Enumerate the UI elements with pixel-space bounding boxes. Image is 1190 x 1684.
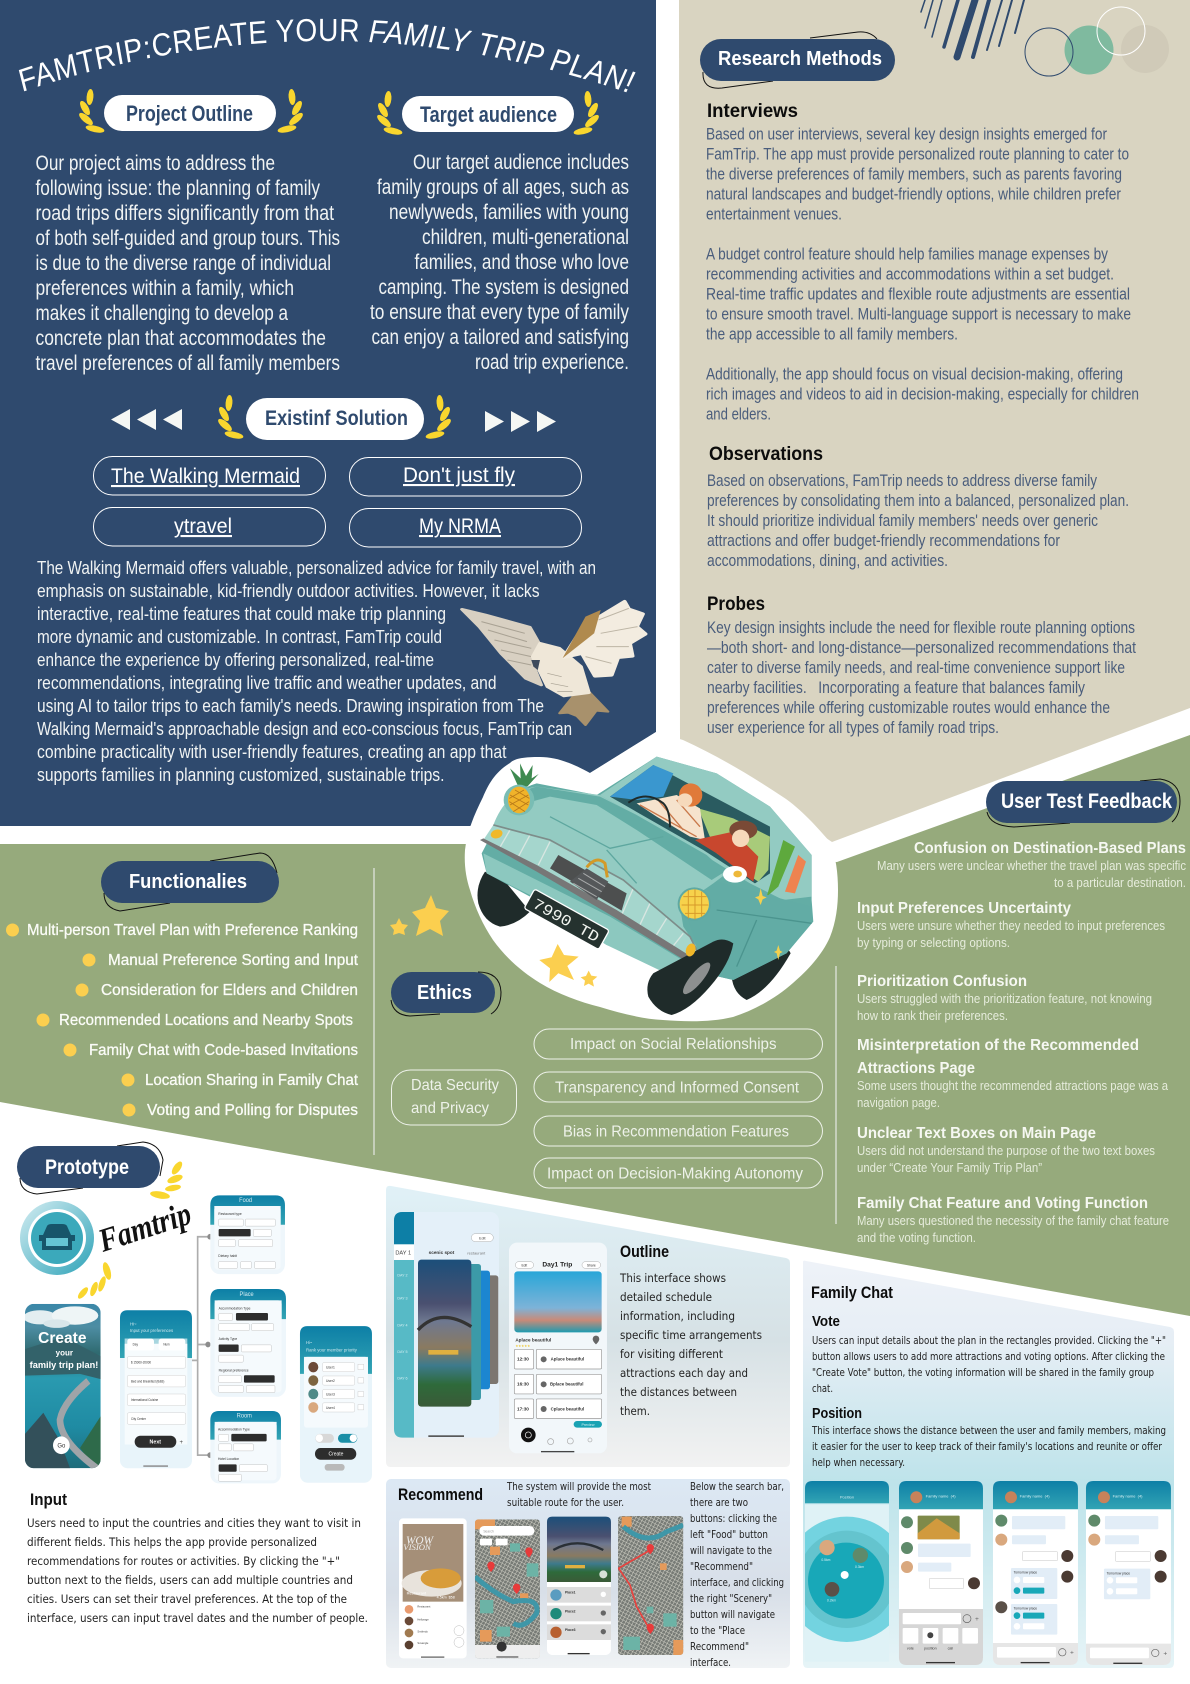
- phone: restaurant recommend: Restaurant: [407, 1591, 427, 1596]
- tag: impact on decision-making autonomy: Impact on Decision-Making Autonomy: [547, 1166, 803, 1182]
- text block: project outline: of both self-guided and group tours. This: [36, 227, 340, 250]
- heading: recommend: Recommend: [398, 1485, 483, 1504]
- phone: day list with photos: DAY 3: [397, 1297, 408, 1301]
- phone: day 1 trip: 16:30: [517, 1382, 529, 1387]
- tag: data security and privacy: [392, 1070, 516, 1125]
- text block: recommend route: The system will provide the most: [506, 1481, 651, 1493]
- phone: position radar: Position: [840, 1495, 854, 1500]
- text block: observations: attractions and offer budget-friendly recommendations for: [707, 532, 1060, 550]
- text block: project outline: Our project aims to address the: [36, 152, 275, 175]
- phone: position radar: 0.2km: [827, 1598, 836, 1602]
- feedback: unclear text boxes: Unclear Text Boxes on Main Page: [857, 1125, 1096, 1142]
- heading: observations: Observations: [709, 444, 823, 465]
- phone: restaurant recommend: 4.5km $58: [437, 1596, 455, 1600]
- phone: welcome screen: family trip plan!: [30, 1360, 98, 1370]
- feedback: misinterpretation of recommended attractions: [857, 1037, 1168, 1110]
- text block: target audience: children, multi-generational: [422, 226, 629, 249]
- connector lines: [192, 1234, 213, 1458]
- feedback: family chat and voting: and the voting function.: [857, 1231, 976, 1245]
- text block: target audience: to ensure that every type of family: [370, 301, 629, 324]
- phones: family chat screens: [784, 1481, 1171, 1665]
- text block: recommend navigation: Recommend": [690, 1641, 749, 1653]
- phone: day 1 trip: Aplace beautiful: [515, 1338, 551, 1343]
- phone: day 1 trip: [509, 1243, 607, 1453]
- text block: position description: help when necessary.: [812, 1457, 905, 1469]
- phone: group chat with tools: vote: [907, 1647, 914, 1651]
- heading: prototype: [17, 1142, 163, 1194]
- text block: observations: It should prioritize individual family members' needs over generic: [707, 512, 1098, 530]
- text block: recommend navigation: button will navigate: [690, 1609, 775, 1621]
- phone: input preferences: [120, 1310, 192, 1468]
- text block: project outline: makes it challenging to develop a: [36, 302, 288, 325]
- title: FAMTRIP:CREATE YOUR FAMILY TRIP PLAN!: [18, 18, 636, 92]
- arrows: pointing right: [485, 411, 556, 432]
- heading: project outline: Project Outline: [126, 101, 253, 126]
- tag: impact on social relationships: Impact on Social Relationships: [570, 1036, 776, 1053]
- feedback: unclear text boxes: Users did not understand the purpose of the two text boxes: [857, 1144, 1155, 1158]
- text block: recommend route: suitable route for the user.: [507, 1497, 624, 1509]
- list: functionalities: [6, 922, 359, 1119]
- text block: interviews: entertainment venues.: [706, 206, 842, 224]
- phone: restaurant recommend: Hellorage: [417, 1618, 429, 1622]
- feedback: input preferences uncertainty: [857, 900, 1165, 950]
- heading: prototype: Prototype: [45, 1156, 129, 1179]
- phone: day list with photos: DAY 1: [395, 1251, 411, 1257]
- text block: vote description: [812, 1335, 1166, 1395]
- heading: functionalities: Functionalies: [129, 871, 247, 893]
- phone: room preferences: Hotel Location: [218, 1457, 239, 1461]
- text block: existing solution analysis: emphasis on sustainable, kid-friendly outdoor activities. However, it lacks: [37, 580, 540, 601]
- text block: existing solution analysis: The Walking Mermaid offers valuable, personalized advice for family travel, with an: [37, 557, 596, 578]
- text block: recommend navigation: to the "Place: [690, 1625, 745, 1637]
- button: My NRMA: [350, 508, 582, 547]
- logo: Famtrip wordmark: Famtrip: [94, 1196, 196, 1260]
- panel: family chat card: [803, 1261, 1174, 1668]
- heading: user test feedback: [986, 779, 1180, 827]
- heading: research methods: [700, 32, 895, 88]
- phone: position radar: 0.5km: [821, 1558, 831, 1562]
- phone: welcome screen: Go: [57, 1443, 66, 1450]
- phone: route on map: [618, 1516, 683, 1655]
- list: functionalities: Recommended Locations and Nearby Spots: [59, 1012, 353, 1029]
- button: ytravel: [94, 508, 326, 546]
- text block: existing solution analysis: combine practicality with user-friendly features, creating an app that: [37, 741, 506, 762]
- phone: voting results: Tomorrow place: [1014, 1571, 1037, 1575]
- heading: family chat: Family Chat: [811, 1283, 893, 1302]
- heading: functionalities: [101, 853, 279, 911]
- heading: ethics: [391, 972, 501, 1016]
- text block: input description: [27, 1516, 368, 1625]
- phone: food preferences: Food: [239, 1198, 252, 1204]
- phone: rank member priority: User1: [326, 1365, 335, 1370]
- phone: day 1 trip: Aplace beautiful: [551, 1357, 584, 1362]
- button: My NRMA: My NRMA: [419, 515, 501, 538]
- phone: welcome screen: Create: [38, 1330, 86, 1347]
- feedback: prioritization confusion: Users struggled with the prioritization feature, not knowing: [857, 992, 1152, 1006]
- phone: voting results: Family name (4): [1020, 1493, 1050, 1498]
- phone: map with pins: Search: [483, 1529, 494, 1533]
- phone: input preferences: Bed and Breakfast (B&B): [131, 1379, 164, 1383]
- phone: group chat with tools: +: [975, 1616, 979, 1623]
- phone: day 1 trip: Edit: [521, 1263, 527, 1267]
- phone: position radar: 0.3km: [855, 1565, 864, 1569]
- phone: rank member priority: User3: [326, 1392, 335, 1396]
- phone: voting results: Tomorrow place: [1014, 1606, 1037, 1610]
- text block: recommend navigation: "Recommend": [690, 1561, 753, 1573]
- decoration: diagonal stripes: [921, 0, 1024, 57]
- phone: input preferences: City Center: [131, 1417, 146, 1421]
- tag: bias in recommendation features: Bias in Recommendation Features: [563, 1124, 789, 1140]
- list: functionalities: Family Chat with Code-based Invitations: [89, 1042, 358, 1059]
- phone: rank member priority: Create: [328, 1451, 344, 1458]
- text block: existing solution analysis: interactive, real-time features that could make trip planning: [37, 603, 446, 624]
- arrows: pointing left: [111, 409, 182, 430]
- licence plate: 7990 TD: [529, 895, 602, 947]
- phone: day 1 trip: Day1 Trip: [542, 1262, 572, 1269]
- phone: input preferences: Input your preferences: [130, 1328, 174, 1333]
- text block: recommend navigation: there are two: [690, 1497, 748, 1509]
- text block: target audience: families, and those who love: [414, 251, 629, 274]
- panel: project overview background: [0, 0, 656, 826]
- phone: input preferences: $ 15000-20000: [131, 1361, 151, 1365]
- phone: welcome screen: [23, 1304, 101, 1468]
- panel: functionalities and feedback background: [0, 735, 1190, 1316]
- illustration: teal car with family: [477, 757, 813, 1015]
- illustration: white cockatoo: [462, 602, 645, 725]
- phone: room preferences: Accommodation Type: [218, 1427, 250, 1431]
- feedback: unclear text boxes: under “Create Your Family Trip Plan”: [857, 1161, 1042, 1175]
- phone: place preferences: Place: [240, 1292, 254, 1298]
- heading: input: Input: [30, 1490, 67, 1509]
- button: Don't just fly: [350, 458, 582, 496]
- text block: interviews: A budget control feature should help families manage expenses by: [706, 246, 1109, 264]
- text block: input description: recommendations for routes or activities. By clicking the "+": [27, 1554, 340, 1568]
- button: The Walking Mermaid: The Walking Mermaid: [111, 465, 300, 488]
- phone: day 1 trip: 17:30: [517, 1406, 529, 1411]
- list: functionalities: Voting and Polling for Disputes: [147, 1102, 358, 1119]
- text block: project outline: is due to the diverse range of individual: [36, 252, 331, 275]
- phone: input preferences: Hi~: [130, 1321, 137, 1326]
- text block: input description: button next to the fields, users can add multiple countries and: [27, 1573, 353, 1587]
- text block: project outline: following issue: the planning of family: [36, 177, 320, 200]
- phone: input preferences: Next: [150, 1439, 161, 1446]
- heading: outline: Outline: [620, 1242, 669, 1261]
- text block: recommend navigation: Below the search bar,: [690, 1481, 784, 1493]
- text block: recommend navigation: interface.: [690, 1657, 731, 1669]
- text block: outline description: This interface shows: [619, 1271, 726, 1285]
- phone: position radar: [805, 1481, 889, 1642]
- text block: interviews: and elders.: [706, 406, 771, 424]
- screens: input prototype flow: [23, 1195, 372, 1483]
- phone: day list with photos: DAY 6: [397, 1377, 408, 1381]
- phone: restaurant recommend: Restaurant: [417, 1605, 431, 1609]
- heading: position: Position: [812, 1405, 862, 1422]
- phone: restaurant recommend: WOW: [406, 1535, 435, 1547]
- panel: recommend card: [386, 1479, 790, 1668]
- text block: observations: accommodations, dining, and activities.: [707, 552, 948, 570]
- feedback: family chat and voting: Family Chat Feature and Voting Function: [857, 1195, 1148, 1212]
- text block: outline description: specific time arrangements: [620, 1328, 762, 1342]
- text block: target audience: newlyweds, families with young: [389, 201, 629, 224]
- tag: data security and privacy: Data Security: [411, 1077, 499, 1094]
- text block: observations: Based on observations, FamTrip needs to address diverse family: [707, 472, 1098, 490]
- feedback: prioritization confusion: how to rank their preferences.: [857, 1009, 1008, 1023]
- text block: existing solution analysis: more dynamic and customizable. In contrast, FamTrip could: [37, 626, 442, 647]
- phone: day 1 trip: 12:30: [517, 1357, 529, 1362]
- phone: input preferences: Day: [133, 1342, 138, 1347]
- text block: target audience: family groups of all ages, such as: [377, 176, 629, 199]
- text block: target audience: road trip experience.: [475, 351, 629, 374]
- phone: day list with photos: DAY 5: [397, 1350, 408, 1354]
- phones: recommendation screens: [399, 1516, 683, 1658]
- phone: day 1 trip: Bplace beautiful: [550, 1382, 583, 1387]
- phone: place preferences: Regional preference: [219, 1368, 249, 1372]
- text block: input description: different fields. This helps the app provide personalized: [27, 1535, 317, 1549]
- phone: rank member priority: Rank your member priority: [306, 1347, 358, 1353]
- button: ytravel: ytravel: [174, 515, 232, 538]
- decoration: overlapping circles: [1025, 7, 1169, 76]
- text block: probes: user experience for all types of family road trips.: [707, 719, 999, 737]
- heading: interviews: Interviews: [707, 101, 798, 122]
- phone: day 1 trip: Share: [587, 1263, 596, 1267]
- text block: recommend navigation: left "Food" button: [690, 1529, 768, 1541]
- phone: place preferences: Activity Type: [219, 1337, 237, 1341]
- phone: food preferences: Restaurant type: [218, 1212, 242, 1216]
- phone: day list with photos: DAY 2: [397, 1273, 408, 1277]
- phone: input preferences: +: [180, 1439, 183, 1446]
- text block: outline description: attractions each day and: [620, 1366, 748, 1380]
- tag: impact on social relationships: [534, 1029, 822, 1059]
- phone: vote creation: Family name (4): [1113, 1493, 1143, 1498]
- heading: project outline: [77, 89, 305, 134]
- phone: map with pins: [475, 1519, 540, 1658]
- phone: room preferences: Room: [237, 1414, 252, 1420]
- text block: project outline: road trips differs significantly from that: [36, 202, 334, 225]
- heading: vote: Vote: [812, 1313, 840, 1330]
- feedback: misinterpretation of recommended attractions: navigation page.: [857, 1096, 940, 1110]
- feedback: family chat and voting: [857, 1195, 1169, 1245]
- feedback: prioritization confusion: Prioritization Confusion: [857, 973, 1027, 990]
- phone: group chat with tools: call: [948, 1647, 953, 1651]
- phone: group chat with tools: position: [924, 1647, 937, 1651]
- text block: interviews: recommending activities and accommodations within a set budget.: [706, 266, 1114, 284]
- list: functionalities: Consideration for Elders and Children: [101, 982, 358, 999]
- text block: outline description: detailed schedule: [620, 1290, 712, 1304]
- phone: place preferences: Accommodation Type: [219, 1306, 251, 1311]
- phone: place recommend: Place1: [565, 1591, 576, 1595]
- text block: position description: [811, 1425, 1166, 1469]
- phone: rank member priority: User4: [326, 1406, 335, 1410]
- phone: input preferences: Num: [163, 1342, 170, 1347]
- phone: place recommend: [547, 1517, 611, 1655]
- tag: transparency and informed consent: Transparency and Informed Consent: [555, 1080, 800, 1096]
- feedback: misinterpretation of recommended attractions: Misinterpretation of the Recommended: [857, 1037, 1139, 1054]
- text block: input description: interface, users can input travel dates and the number of people.: [27, 1611, 368, 1625]
- feedback: unclear text boxes: [857, 1125, 1155, 1175]
- phone: rank member priority: [300, 1326, 372, 1483]
- text block: project outline: travel preferences of all family members: [36, 352, 340, 375]
- phone: rank member priority: User2: [326, 1379, 335, 1383]
- feedback: confusion on destination-based plans: [877, 840, 1186, 890]
- icon: yellow stars: [390, 895, 449, 936]
- phone: place preferences: [210, 1289, 286, 1397]
- text block: target audience: camping. The system is designed: [378, 276, 629, 299]
- heading: existing solution: Existinf Solution: [265, 407, 408, 430]
- list: functionalities: Multi-person Travel Plan with Preference Ranking: [27, 922, 358, 939]
- feedback: input preferences uncertainty: Input Preferences Uncertainty: [857, 900, 1071, 917]
- text block: interviews: [706, 126, 1139, 424]
- text block: probes: [707, 619, 1136, 737]
- list: functionalities: Manual Preference Sorting and Input: [108, 952, 359, 969]
- phones: day schedule screens: [394, 1212, 607, 1453]
- phone: restaurant recommend: [399, 1518, 467, 1658]
- tag: bias in recommendation features: [534, 1116, 822, 1146]
- text block: input description: Users need to input the countries and cities they want to visit in: [27, 1516, 361, 1530]
- text block: recommend navigation: buttons: clicking the: [690, 1513, 777, 1525]
- panel: outline card: [386, 1186, 790, 1467]
- text block: outline description: information, including: [620, 1309, 735, 1323]
- phone: day list with photos: scenic spot: [429, 1250, 455, 1255]
- phone: input preferences: International Cuisine: [131, 1398, 158, 1402]
- phone: vote creation: +: [1163, 1650, 1167, 1657]
- panel: research methods background: [679, 0, 1190, 842]
- text block: target audience: can enjoy a tailored and satisfying: [372, 326, 629, 349]
- phone: day 1 trip: Cplace beautiful: [551, 1406, 584, 1411]
- text block: probes: nearby facilities. Incorporating a feature that balances family: [707, 679, 1086, 697]
- heading: probes: Probes: [707, 594, 765, 615]
- heading: target audience: Target audience: [420, 102, 557, 127]
- text block: recommend navigation: interface, and clicking: [690, 1577, 784, 1589]
- text block: project outline: concrete plan that accommodates the: [36, 327, 326, 350]
- text block: recommend navigation: will navigate to the: [690, 1545, 772, 1557]
- phone: day list with photos: restaurant: [467, 1251, 486, 1256]
- feedback: prioritization confusion: [857, 973, 1152, 1023]
- heading: ethics: Ethics: [417, 982, 472, 1004]
- text block: target audience: [370, 151, 629, 374]
- phone: day 1 trip: Preview: [581, 1423, 595, 1427]
- feedback: input preferences uncertainty: Users were unsure whether they needed to input preferences: [857, 919, 1165, 933]
- decoration: laurels near prototype: [76, 1160, 184, 1300]
- phone: vote creation: Tomorrow place: [1107, 1571, 1130, 1575]
- text block: target audience: Our target audience includes: [413, 151, 629, 174]
- text block: recommend route: [506, 1481, 651, 1509]
- phone: place recommend: Place3: [565, 1628, 576, 1632]
- text block: outline description: for visiting different: [620, 1347, 723, 1361]
- text block: existing solution analysis: [37, 557, 596, 785]
- text block: interviews: the app accessible to all family members.: [706, 326, 958, 344]
- heading: research methods: Research Methods: [718, 48, 882, 70]
- feedback: input preferences uncertainty: by typing or selecting options.: [857, 936, 1010, 950]
- tag: data security and privacy: and Privacy: [411, 1100, 489, 1117]
- list: functionalities: Location Sharing in Family Chat: [145, 1072, 359, 1089]
- text block: input description: cities. Users can set their travel preferences. At the top of the: [27, 1592, 347, 1606]
- phone: rank member priority: Hi~: [306, 1340, 313, 1345]
- text block: observations: [707, 472, 1129, 570]
- text block: project outline: preferences within a family, which: [36, 277, 294, 300]
- text block: existing solution analysis: recommendations, integrating live traffic and weather updates, and: [37, 672, 496, 693]
- text block: vote description: chat.: [812, 1383, 833, 1395]
- phone: food preferences: Dietary habit: [218, 1254, 237, 1258]
- button: Don't just fly: Don't just fly: [403, 464, 515, 487]
- phone: place recommend: Place2: [565, 1609, 576, 1613]
- text block: recommend navigation: the right "Scenery": [690, 1593, 772, 1605]
- logo: app icon: [20, 1201, 94, 1275]
- text block: outline description: them.: [620, 1404, 650, 1418]
- text block: recommend navigation: [690, 1481, 784, 1669]
- text block: probes: preferences while offering customizable routes would enhance the: [707, 699, 1110, 717]
- phone: restaurant recommend: VISION: [403, 1542, 432, 1552]
- phone: day list with photos: DAY 4: [397, 1323, 408, 1327]
- text block: existing solution analysis: enhance the experience by offering personalized, real-time: [37, 649, 434, 670]
- phone: restaurant recommend: Sovangle: [417, 1641, 429, 1645]
- button: The Walking Mermaid: [94, 456, 326, 495]
- tag: transparency and informed consent: [534, 1072, 822, 1102]
- phone: welcome screen: your: [56, 1348, 74, 1358]
- phone: food preferences: [210, 1195, 285, 1274]
- phone: day list with photos: Edit: [479, 1236, 485, 1240]
- heading: existing solution: [216, 395, 453, 440]
- tag: impact on decision-making autonomy: [534, 1158, 822, 1188]
- text block: interviews: Based on user interviews, several key design insights emerged for: [706, 126, 1107, 144]
- text block: outline description: the distances between: [620, 1385, 737, 1399]
- text block: outline description: [619, 1271, 762, 1418]
- text block: project outline: [36, 152, 340, 375]
- phone: day list with photos: [394, 1212, 499, 1438]
- sticker: white blob behind car: [465, 732, 838, 1021]
- heading: target audience: [375, 91, 601, 136]
- text block: existing solution analysis: supports families in planning customized, sustainable trips.: [37, 764, 444, 785]
- phone: restaurant recommend: Smilerdo: [417, 1629, 428, 1633]
- phone: room preferences: [210, 1411, 281, 1483]
- phone: group chat with tools: [899, 1481, 983, 1665]
- feedback: misinterpretation of recommended attractions: Attractions Page: [857, 1060, 975, 1077]
- text block: existing solution analysis: using AI to tailor trips to each family's needs. Drawing inspiration from The: [37, 695, 544, 716]
- phone: voting results: +: [1070, 1650, 1074, 1657]
- licence plate: [524, 889, 609, 950]
- phone: group chat with tools: Family name (4): [926, 1493, 956, 1498]
- phone: day 1 trip: ★★★★★: [515, 1344, 530, 1348]
- phone: voting results: [993, 1481, 1078, 1665]
- phone: vote creation: [1086, 1481, 1171, 1665]
- text block: existing solution analysis: Walking Mermaid's approachable design and eco-conscious focus, FamTrip can: [37, 718, 572, 739]
